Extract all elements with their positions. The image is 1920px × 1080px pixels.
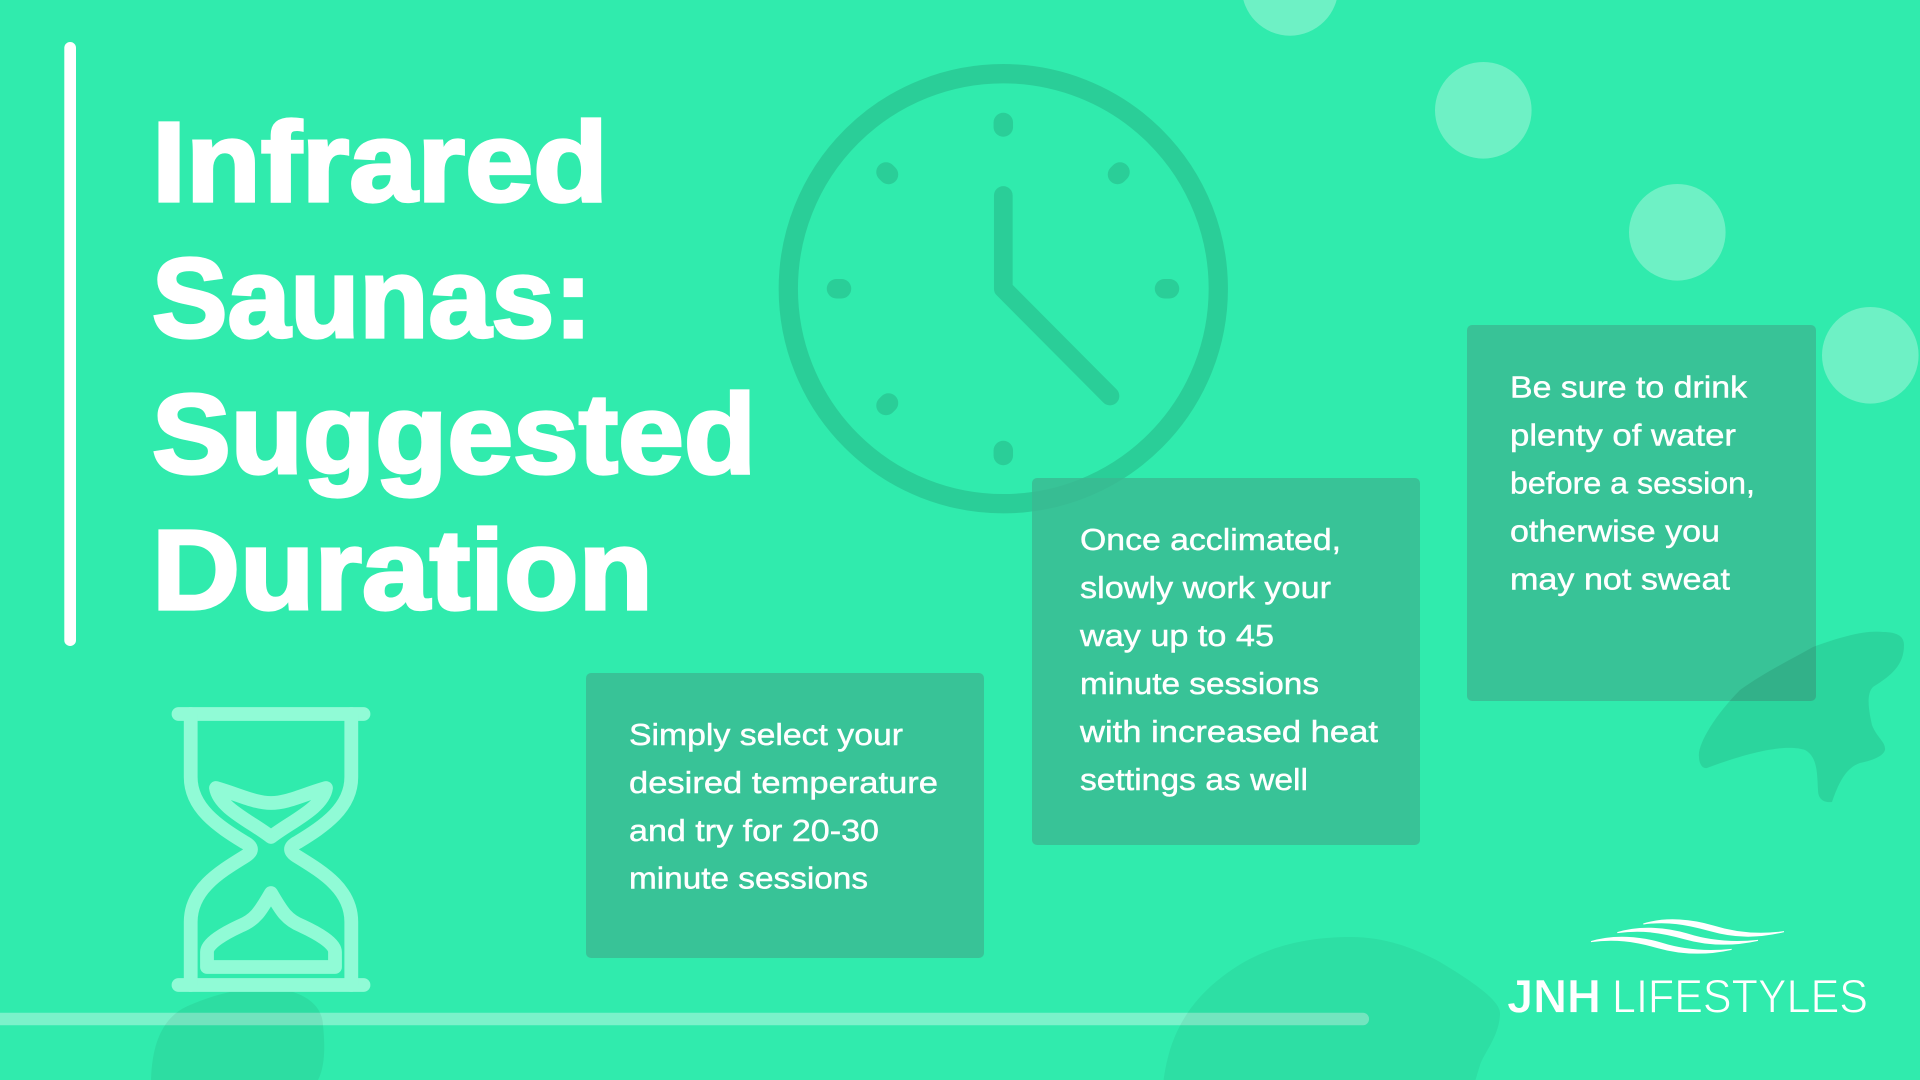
logo: waves <box>1591 920 1784 953</box>
text: step one: minute sessions <box>629 860 868 896</box>
logo: wordmark: LIFESTYLES <box>1612 971 1868 1024</box>
text: step two: Once acclimated, <box>1080 522 1341 557</box>
text: step three: before a session, <box>1510 466 1755 500</box>
text: step three: Be sure to drink <box>1510 370 1748 404</box>
blob: right <box>1699 632 1904 802</box>
logo: wordmark <box>1507 971 1868 1024</box>
text: step two: way up to 45 <box>1079 618 1274 653</box>
text: step one: Simply select your <box>629 717 903 752</box>
text: step two <box>1079 522 1378 797</box>
title: Suggested <box>152 371 756 497</box>
text: step three <box>1510 370 1755 596</box>
text: step two: settings as well <box>1080 762 1308 797</box>
logo: wordmark: JNH <box>1507 971 1601 1024</box>
text: step two: with increased heat <box>1079 714 1378 749</box>
title: Saunas: <box>152 235 592 361</box>
bottom horizontal bar <box>0 1013 1369 1025</box>
vertical accent bar <box>64 42 76 646</box>
decorative circles <box>1242 0 1919 404</box>
text: step one <box>629 717 938 896</box>
blob: bottom left <box>151 988 324 1080</box>
icon: hourglass <box>178 714 364 985</box>
text: step three: may not sweat <box>1510 562 1730 596</box>
text: step one: desired temperature <box>629 765 938 800</box>
title <box>152 99 756 633</box>
text: step two: slowly work your <box>1080 570 1331 605</box>
panel: step two <box>1032 478 1420 845</box>
panel: step three <box>1467 325 1816 701</box>
text: step three: plenty of water <box>1510 418 1736 452</box>
icon: clock <box>788 74 1218 504</box>
text: step two: minute sessions <box>1080 666 1319 701</box>
text: step three: otherwise you <box>1510 514 1720 548</box>
title: Infrared <box>152 99 608 225</box>
text: step one: and try for 20-30 <box>629 813 879 848</box>
panel: step one <box>586 673 984 958</box>
title: Duration <box>152 507 653 633</box>
blob: bottom center <box>1163 937 1500 1080</box>
